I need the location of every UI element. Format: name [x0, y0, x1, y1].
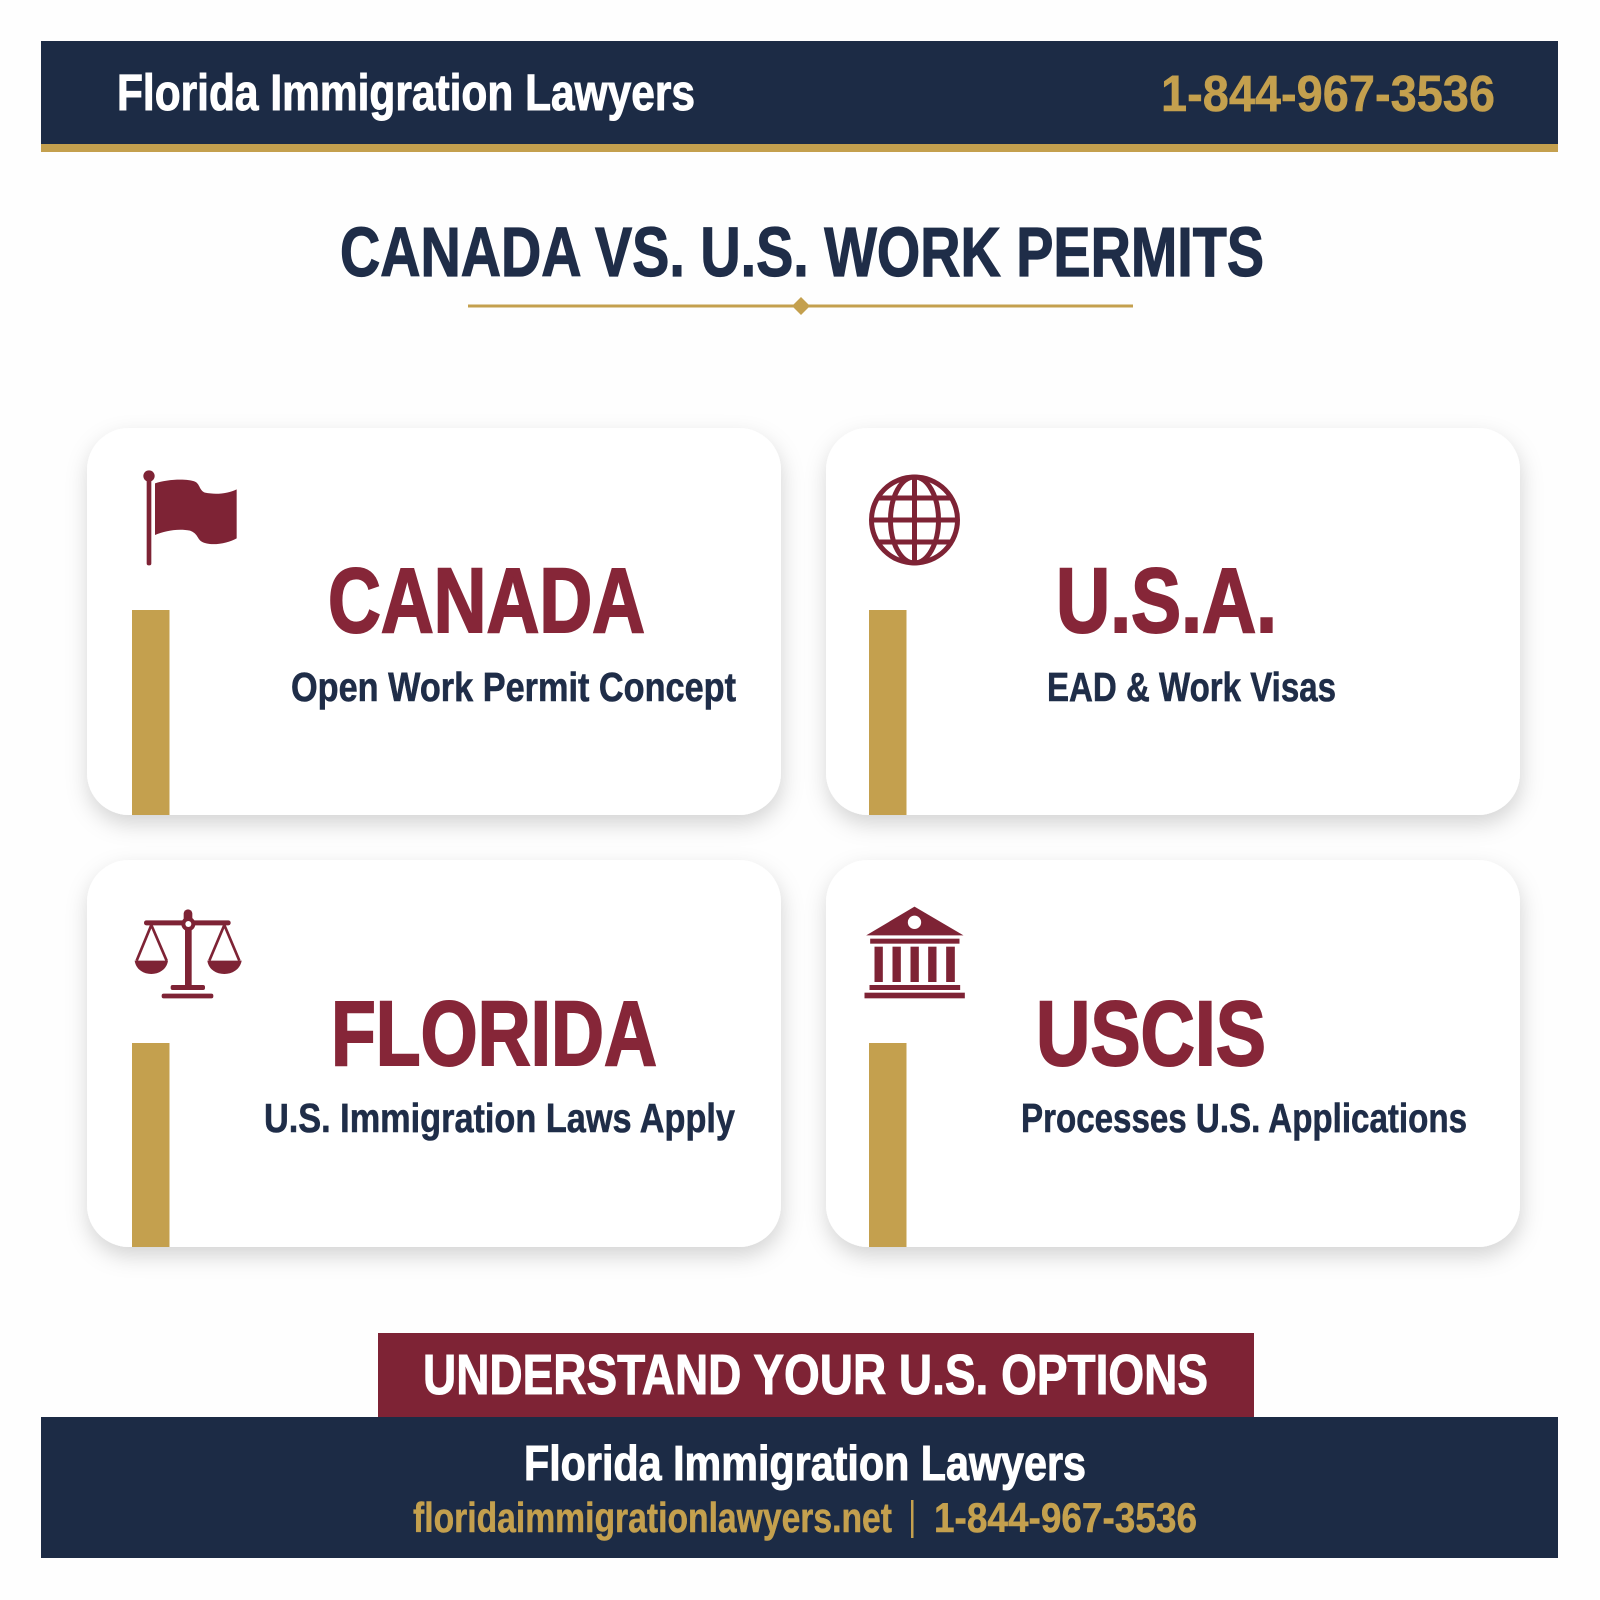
panel: Florida [87, 860, 781, 1247]
heading: CANADA [328, 550, 645, 652]
footer website: floridaimmigrationlawyers.net [413, 1494, 892, 1541]
panel: USCIS [826, 860, 1520, 1247]
gold bar [869, 1043, 906, 1247]
gold bar [869, 610, 906, 815]
title: CANADA VS. U.S. WORK PERMITS [340, 213, 1264, 291]
phone number: 1-844-967-3536 [1161, 65, 1495, 122]
subheading: Open Work Permit Concept [291, 664, 736, 710]
footer banner [41, 1417, 1558, 1558]
subheading: Processes U.S. Applications [1021, 1095, 1467, 1141]
panel: U.S.A. [826, 428, 1520, 815]
header banner [41, 41, 1558, 152]
icon: scales of justice [135, 909, 242, 998]
footer divider [911, 1500, 914, 1538]
gold bar [132, 610, 170, 815]
subheading: EAD & Work Visas [1047, 664, 1336, 710]
gold bar [132, 1043, 170, 1247]
footer phone: 1-844-967-3536 [934, 1494, 1197, 1541]
icon: government building [864, 907, 965, 998]
heading: U.S.A. [1056, 550, 1277, 652]
title rule with diamond [468, 297, 1133, 315]
icon: globe [872, 477, 958, 563]
subheading: U.S. Immigration Laws Apply [264, 1095, 735, 1141]
panel: Canada [87, 428, 781, 815]
call-to-action banner: UNDERSTAND YOUR U.S. OPTIONS [423, 1343, 1208, 1407]
call-to-action banner [378, 1333, 1254, 1418]
footer firm name: Florida Immigration Lawyers [524, 1437, 1086, 1491]
heading: FLORIDA [331, 983, 657, 1085]
icon: flag [143, 470, 237, 565]
firm name: Florida Immigration Lawyers [117, 64, 695, 121]
heading: USCIS [1036, 983, 1266, 1085]
